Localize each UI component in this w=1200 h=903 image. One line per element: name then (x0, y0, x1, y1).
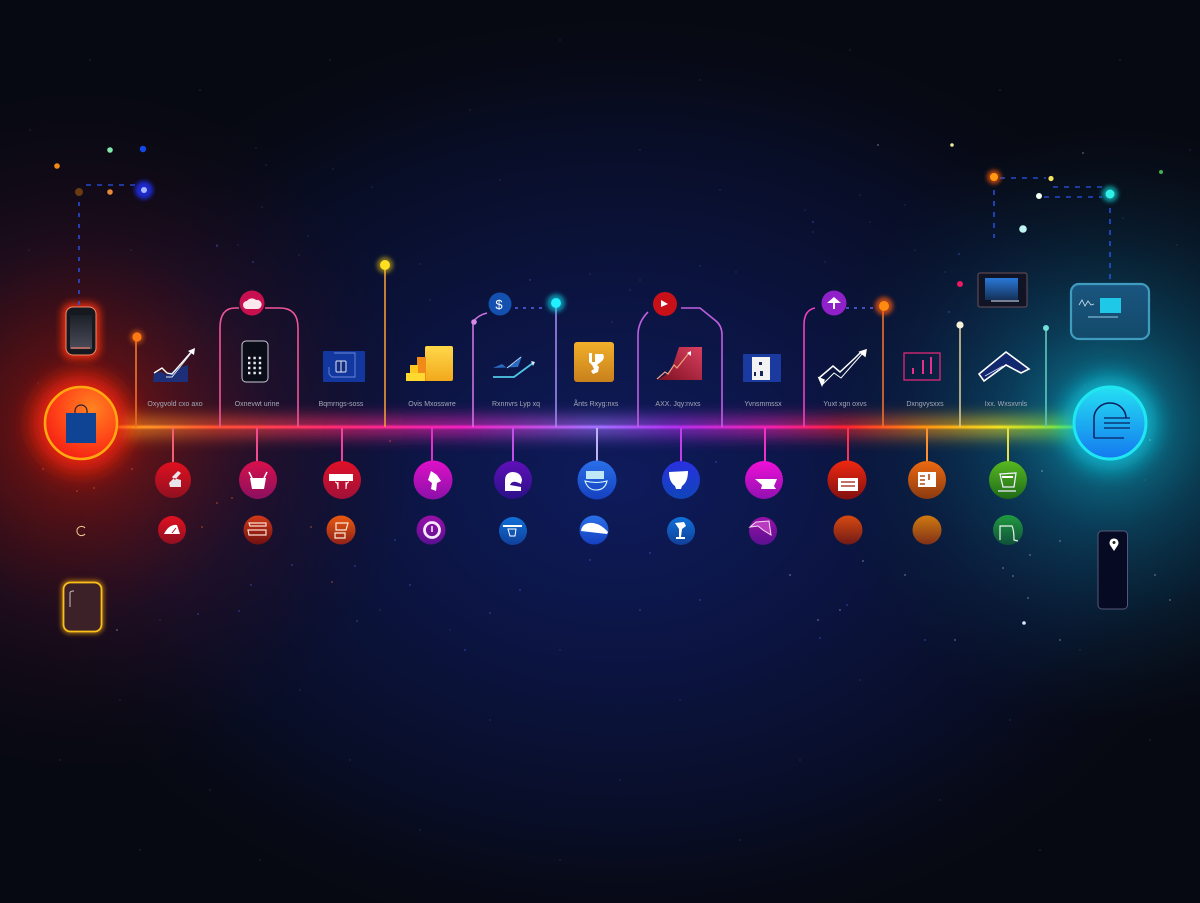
small ring glyph (77, 526, 85, 536)
icon: blue card (323, 351, 365, 382)
icon: white blue chevron (979, 352, 1029, 381)
circle icon 6 (578, 460, 616, 500)
labels (147, 399, 1028, 408)
small icon 6 (580, 516, 608, 544)
icon: red growth chart (657, 347, 702, 380)
card: yellow outline bottom left (61, 580, 104, 634)
circle icon 2 (239, 461, 277, 499)
icon: gold trophy tile (574, 342, 614, 382)
icon: calculator phone (242, 341, 268, 382)
icon: white zigzag arrow (819, 350, 866, 385)
small icon 10 (912, 516, 942, 544)
circle icon 1 (155, 462, 191, 498)
small icon 3 (326, 516, 356, 544)
right hub: dome document (1063, 376, 1157, 470)
circle icon 7 (662, 461, 700, 499)
labels: Rxnnvrs Lyp xq (492, 401, 540, 408)
device: phone top left (62, 303, 100, 359)
second icon row (158, 515, 1023, 545)
labels: Yuxt xgn oxvs (823, 401, 867, 408)
node dots on stems (130, 257, 1049, 344)
labels: Ãnts Rxyg:nxs (574, 399, 619, 408)
small icon 11 (993, 515, 1023, 545)
small icon 9 (834, 516, 862, 544)
icon: chart 1 (153, 348, 195, 382)
card: teal dashboard (1071, 284, 1149, 339)
icon: pink bar chart (904, 353, 940, 380)
circle icon 4 (414, 460, 452, 500)
small icon 2 (244, 516, 272, 544)
lower icon row (155, 460, 1027, 500)
connectors: upper stems and brackets (136, 265, 1046, 427)
labels: Dxngvysxxs (906, 401, 944, 408)
badge: play (653, 292, 677, 316)
card: laptop (978, 273, 1027, 307)
small icon 1 (158, 516, 186, 544)
circle icon 9 (828, 460, 866, 500)
small icon 4 (416, 516, 446, 544)
icon: blue square document (743, 354, 781, 382)
labels: Oxnevwt urine (235, 401, 279, 408)
circle icon 11 (989, 461, 1027, 499)
circle icon 10 (908, 461, 946, 499)
circle icon 8 (745, 461, 783, 499)
connector: top right dashed network (950, 143, 1163, 625)
icon: yellow blocks (406, 346, 453, 381)
circle icon 5 (494, 461, 532, 499)
badge: umbrella up (822, 290, 846, 316)
left hub: shopping bag (33, 375, 129, 471)
labels: AXX. Jqy:nvxs (655, 401, 701, 408)
small icon 7 (667, 517, 695, 545)
labels: Bqmrngs-soss (319, 401, 364, 408)
small icon 5 (499, 517, 527, 545)
badge: cloud (240, 290, 264, 316)
labels: Ixx. Wxsxvnls (985, 401, 1028, 408)
connector: top left dashed network (54, 146, 153, 305)
device: phone outline with pin (1098, 531, 1128, 609)
circle icon 3 (323, 461, 361, 499)
connectors: lower stems (173, 428, 1008, 462)
timeline: main horizontal line (118, 418, 1075, 436)
connector badges (240, 290, 846, 316)
badge: dollar: $ (495, 297, 503, 312)
labels: Yvnsmmssx (744, 401, 782, 408)
small icon 8 (749, 517, 777, 545)
badge: dollar (488, 292, 512, 316)
icon: blue line chart (493, 356, 535, 377)
labels: Oxygvold cxo axo (147, 401, 203, 408)
labels: Ovis Mxosswre (408, 401, 456, 408)
